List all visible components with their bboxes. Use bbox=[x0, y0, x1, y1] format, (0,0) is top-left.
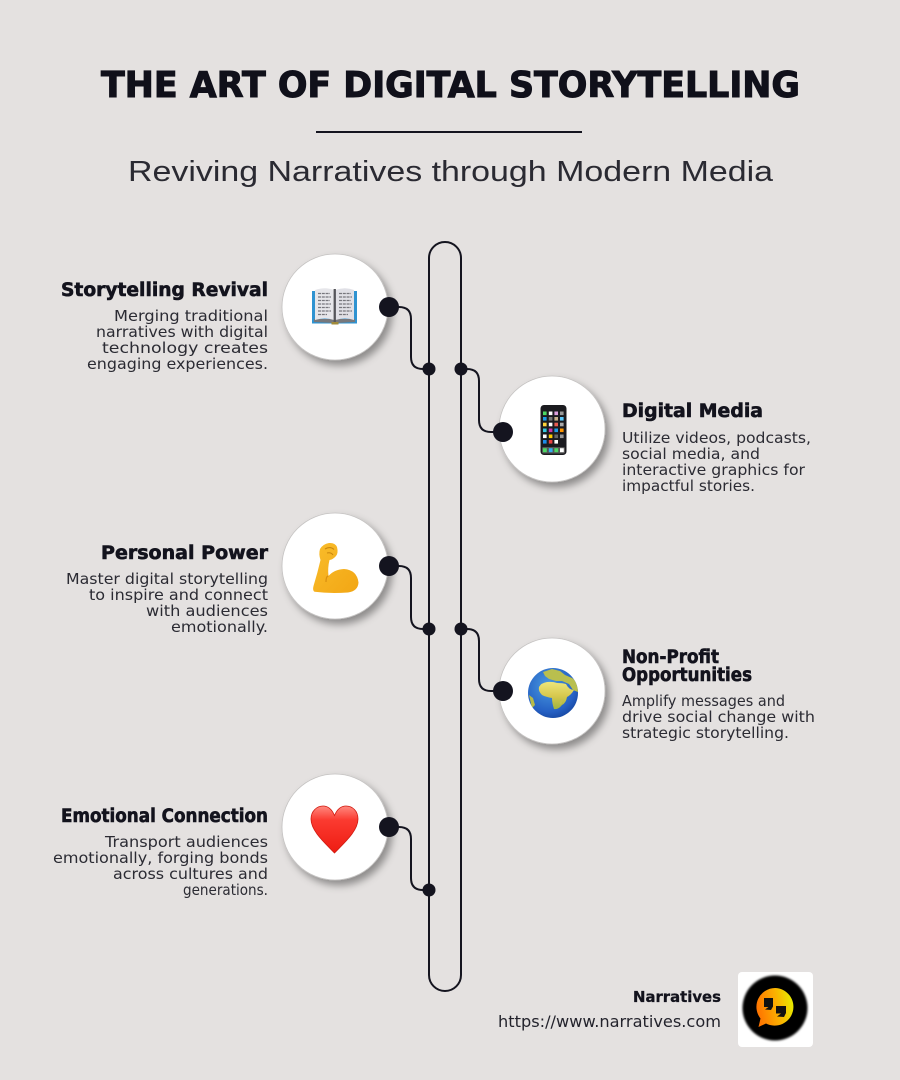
description bbox=[622, 429, 811, 495]
connector node bbox=[379, 556, 399, 576]
footer url: https://www.narratives.com bbox=[498, 1012, 721, 1031]
connector node bbox=[493, 422, 513, 442]
description: Transport audiences bbox=[104, 833, 268, 851]
heading: Storytelling Revival bbox=[61, 280, 268, 301]
description bbox=[66, 570, 268, 636]
title: THE ART OF DIGITAL STORYTELLING bbox=[101, 65, 800, 106]
heading: Digital Media bbox=[622, 401, 763, 422]
connector node bbox=[379, 297, 399, 317]
description: with audiences bbox=[146, 602, 268, 620]
connector: storytelling revival bbox=[389, 307, 429, 369]
item: non-profit opportunities bbox=[493, 638, 815, 744]
heading: Emotional Connection bbox=[61, 806, 268, 827]
logo bbox=[738, 972, 813, 1047]
heading: Non-Profit bbox=[622, 647, 719, 668]
description: emotionally. bbox=[171, 618, 268, 636]
description: emotionally, forging bonds bbox=[53, 849, 268, 867]
description bbox=[87, 307, 268, 373]
heading: Opportunities bbox=[622, 665, 752, 686]
description bbox=[53, 833, 268, 899]
footer brand name: Narratives bbox=[633, 988, 721, 1006]
description: Utilize videos, podcasts, bbox=[622, 429, 811, 447]
connector node bbox=[379, 817, 399, 837]
item: personal power bbox=[66, 513, 399, 636]
description bbox=[622, 692, 815, 742]
item: storytelling revival bbox=[61, 254, 399, 373]
item: digital media bbox=[493, 376, 811, 495]
description: interactive graphics for bbox=[622, 461, 806, 479]
description: impactful stories. bbox=[622, 477, 755, 495]
description: social media, and bbox=[622, 445, 760, 463]
heading bbox=[622, 647, 752, 686]
description: Amplify messages and bbox=[622, 692, 785, 710]
junction nodes on rail bbox=[422, 362, 468, 896]
description: to inspire and connect bbox=[89, 586, 268, 604]
connector: digital media bbox=[461, 369, 503, 432]
description: Master digital storytelling bbox=[66, 570, 268, 588]
connector node bbox=[493, 681, 513, 701]
subtitle: Reviving Narratives through Modern Media bbox=[128, 156, 774, 188]
icon circle: globe bbox=[499, 638, 605, 744]
connector: non-profit opportunities bbox=[461, 629, 503, 691]
connector: emotional connection bbox=[389, 827, 429, 890]
description: strategic storytelling. bbox=[622, 724, 789, 742]
description: Merging traditional bbox=[114, 307, 268, 325]
description: across cultures and bbox=[113, 865, 268, 883]
connector: personal power bbox=[389, 566, 429, 629]
icon circle: open book bbox=[282, 254, 388, 360]
item: emotional connection bbox=[53, 774, 399, 899]
icon circle: heart bbox=[282, 774, 388, 880]
description: technology creates bbox=[102, 339, 268, 357]
central timeline rail bbox=[429, 242, 461, 991]
description: engaging experiences. bbox=[87, 355, 268, 373]
description: drive social change with bbox=[622, 708, 815, 726]
icon circle: flexed biceps bbox=[282, 513, 388, 619]
description: narratives with digital bbox=[96, 323, 268, 341]
description: generations. bbox=[183, 881, 268, 899]
icon circle: smartphone bbox=[499, 376, 605, 482]
heading: Personal Power bbox=[101, 543, 269, 564]
